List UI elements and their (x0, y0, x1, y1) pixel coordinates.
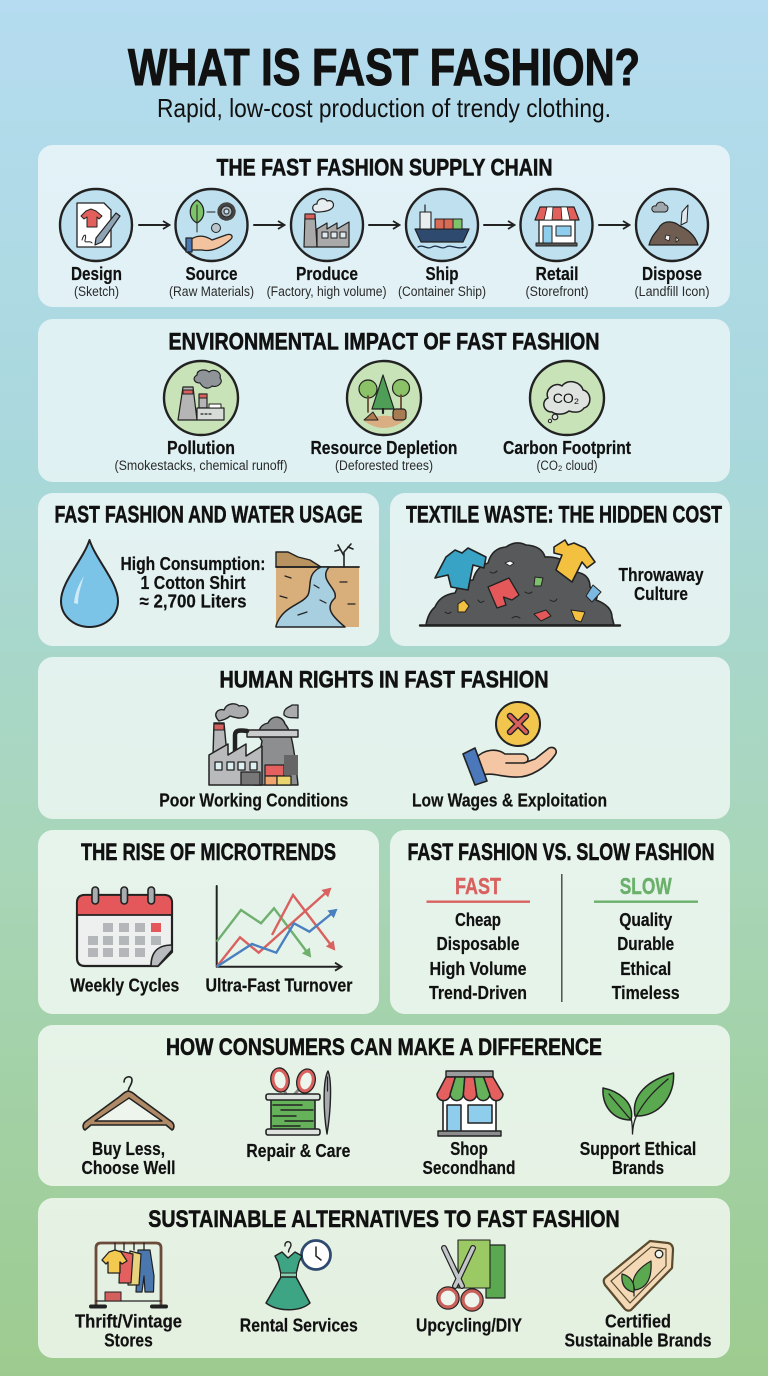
column: slow: Ethical (620, 958, 671, 979)
label: upcycling: Upcycling/DIY (416, 1314, 523, 1336)
label: thrift stores (75, 1310, 182, 1350)
heading: water usage: FAST FASHION AND WATER USAGE (54, 502, 362, 528)
chart: trend lines (217, 886, 341, 967)
panel: textile waste (390, 493, 730, 646)
heading: sustainable alternatives: SUSTAINABLE ALTERNATIVES TO FAST FASHION (148, 1206, 620, 1233)
step labels: (Sketch) (74, 284, 119, 299)
column: fast: FAST (455, 873, 501, 899)
label: shop secondhand: Secondhand (422, 1157, 516, 1178)
icon: carbon cloud (530, 361, 604, 435)
icon: poor factory (209, 704, 298, 785)
label: thrift stores: Thrift/Vintage (75, 1310, 182, 1332)
panel: microtrends (38, 830, 379, 1014)
panel: water usage (38, 493, 379, 646)
icon: waste heap (420, 540, 620, 626)
icon: eco tag (604, 1241, 673, 1311)
step labels: (Landfill Icon) (634, 284, 710, 299)
label: shop secondhand (422, 1138, 516, 1178)
column: slow: SLOW (620, 873, 672, 899)
text: throwaway culture: Culture (634, 583, 688, 604)
icon: factory (291, 189, 363, 261)
icon: design sketch (60, 189, 132, 261)
panel: sustainable alternatives (38, 1198, 730, 1358)
labels: environmental impact: (CO₂ cloud) (536, 458, 598, 473)
icon: landfill (636, 189, 708, 261)
labels: environmental impact: (Smokestacks, chemical runoff) (114, 458, 288, 473)
icon: dress and clock (266, 1240, 330, 1310)
label: rental services: Rental Services (240, 1314, 358, 1336)
heading: human rights: HUMAN RIGHTS IN FAST FASHION (220, 666, 548, 694)
label: thrift stores: Stores (104, 1330, 153, 1350)
icon: leaves (603, 1073, 674, 1134)
text: high consumption: 1 Cotton Shirt (140, 572, 246, 593)
heading: environmental impact: ENVIRONMENTAL IMPACT OF FAST FASHION (168, 328, 600, 356)
text: high consumption: ≈ 2,700 Liters (140, 590, 246, 612)
column: slow (594, 873, 698, 1003)
panel: fast vs slow (390, 830, 730, 1014)
column: fast: Disposable (436, 933, 520, 954)
labels: environmental impact (114, 437, 631, 473)
labels: environmental impact: Resource Depletion (310, 437, 458, 458)
step labels: (Raw Materials) (169, 284, 254, 299)
text: high consumption: High Consumption: (120, 553, 266, 574)
column: fast: High Volume (430, 958, 526, 979)
icon: clothes rack (91, 1243, 166, 1306)
column: fast: Trend-Driven (429, 982, 527, 1003)
label: certified sustainable brands: Sustainable Brands (564, 1330, 712, 1350)
label: buy less: Choose Well (82, 1157, 176, 1178)
icon: spool, scissors, needle (266, 1069, 331, 1135)
icon: scissors and fabric (439, 1240, 505, 1309)
labels: environmental impact: Carbon Footprint (503, 437, 631, 458)
step labels: (Storefront) (526, 284, 588, 299)
text: throwaway culture: Throwaway (618, 564, 704, 585)
step labels: Ship (426, 263, 458, 284)
heading: supply chain: THE FAST FASHION SUPPLY CHAIN (216, 154, 552, 182)
icon: carbon cloud: CO₂ (553, 390, 579, 406)
label: repair and care: Repair & Care (246, 1140, 350, 1161)
panel: human rights (38, 657, 730, 819)
column: slow: Durable (617, 933, 674, 954)
arrow (369, 224, 399, 226)
step labels (71, 263, 710, 299)
label: weekly cycles: Weekly Cycles (70, 974, 179, 996)
subtitle: Rapid, low-cost production of trendy clothing. (157, 93, 611, 123)
heading: consumers: HOW CONSUMERS CAN MAKE A DIFFERENCE (166, 1034, 602, 1061)
icon: hanger (83, 1077, 174, 1130)
icon: hand with crossed coin (463, 702, 556, 785)
step labels: Retail (536, 263, 578, 284)
text: high consumption (120, 553, 266, 612)
label: support ethical brands: Brands (612, 1157, 664, 1178)
arrow (484, 224, 514, 226)
icon: storefront (520, 189, 592, 261)
panel: consumers (38, 1025, 730, 1186)
label: certified sustainable brands: Certified (605, 1310, 671, 1332)
column: fast: Cheap (455, 909, 501, 930)
icon: container ship (406, 189, 478, 261)
step labels: Source (186, 263, 238, 284)
icon: resource depletion (347, 361, 421, 435)
label: poor working conditions: Poor Working Conditions (159, 790, 348, 810)
label: buy less (82, 1138, 176, 1178)
step labels: Dispose (642, 263, 702, 284)
icon: water drop (61, 540, 118, 627)
step labels: Produce (296, 263, 358, 284)
title: WHAT IS FAST FASHION? (128, 39, 640, 97)
column: slow: Timeless (612, 982, 680, 1003)
icon: raw materials (176, 189, 248, 261)
arrow (599, 224, 629, 226)
column: slow: Quality (619, 909, 673, 930)
heading: microtrends: THE RISE OF MICROTRENDS (81, 839, 336, 866)
arrow (139, 224, 169, 226)
label: ultra-fast turnover: Ultra-Fast Turnover (206, 974, 352, 996)
step labels: Design (71, 263, 122, 284)
icon: pollution (164, 361, 238, 435)
labels: environmental impact: Pollution (167, 437, 235, 458)
label: support ethical brands: Support Ethical (580, 1138, 696, 1159)
icon: secondhand shop (437, 1071, 503, 1136)
step labels: (Factory, high volume) (267, 284, 387, 299)
label: low wages: Low Wages & Exploitation (412, 790, 607, 810)
panel: environmental impact (38, 319, 730, 482)
labels: environmental impact: (Deforested trees) (335, 458, 433, 473)
icon: calendar (77, 887, 172, 966)
label: certified sustainable brands (564, 1310, 712, 1350)
panel: supply chain (38, 145, 730, 307)
label: shop secondhand: Shop (450, 1138, 488, 1159)
label: buy less: Buy Less, (92, 1138, 165, 1159)
icon: dried river (276, 544, 359, 627)
step labels: (Container Ship) (398, 284, 486, 299)
column: fast (426, 873, 530, 1003)
arrow (254, 224, 284, 226)
label: support ethical brands (580, 1138, 696, 1178)
text: throwaway culture (618, 564, 704, 604)
